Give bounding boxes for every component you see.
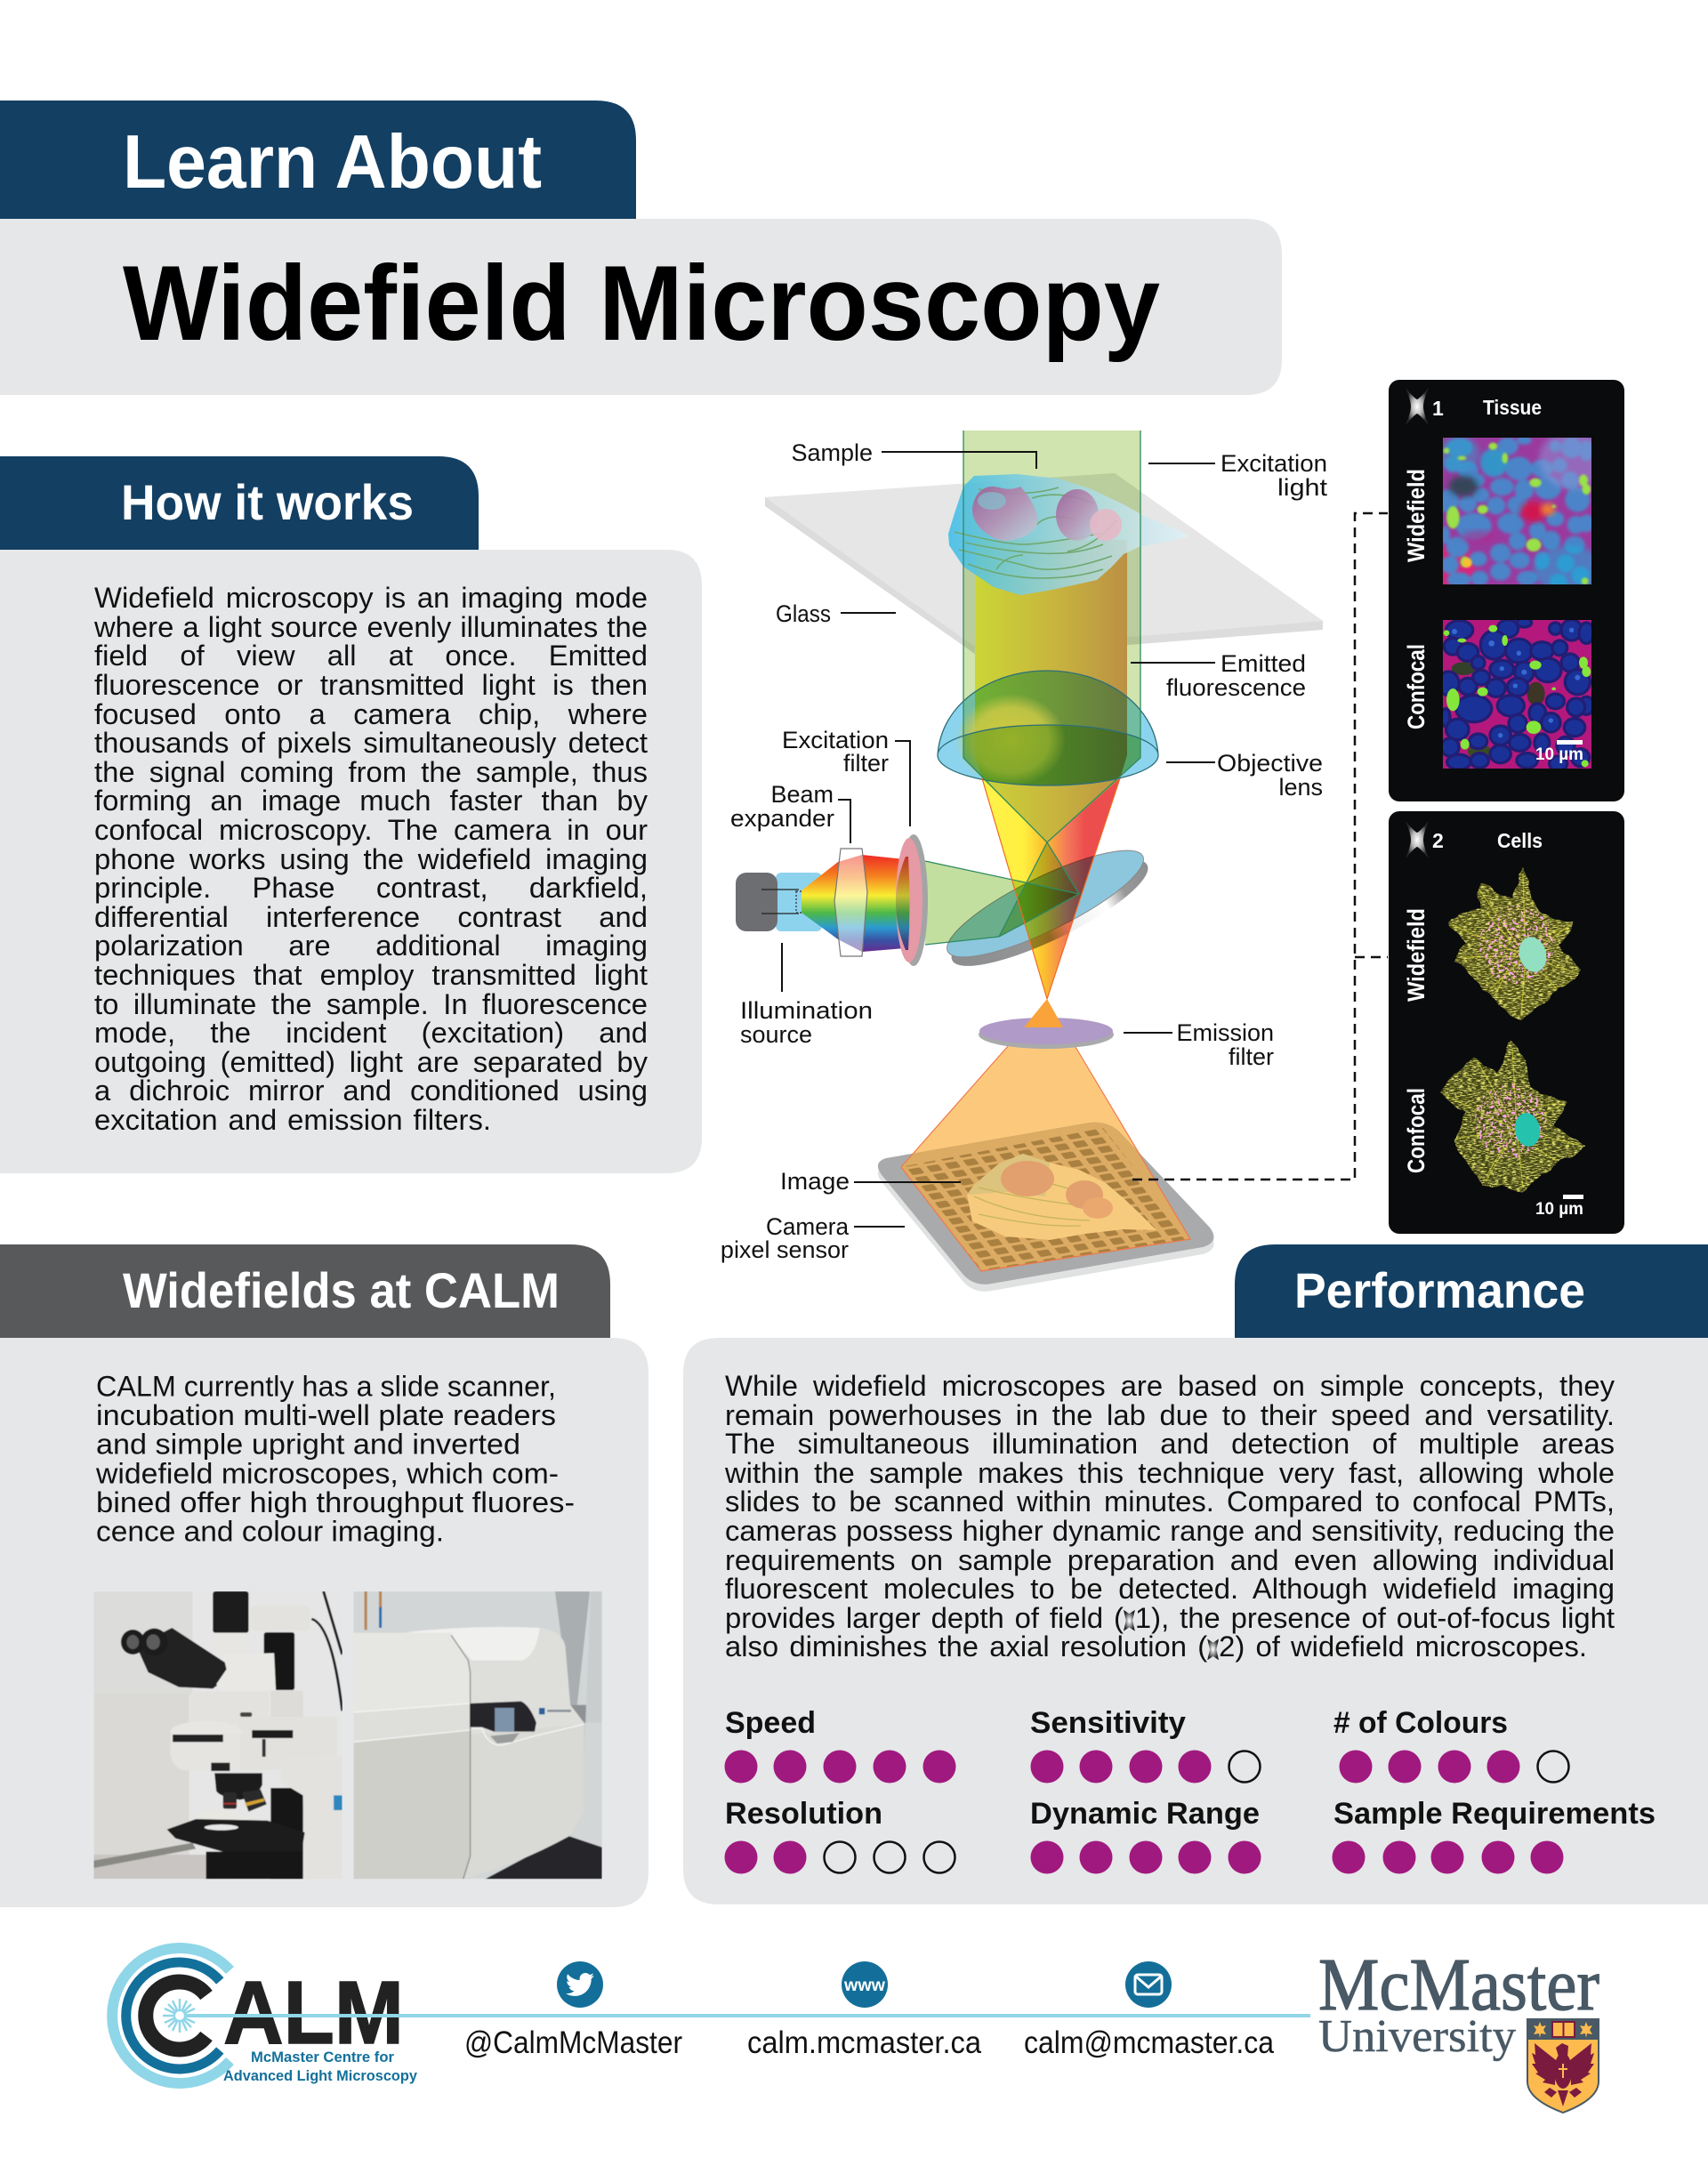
photo: slide scanner (353, 1591, 602, 1879)
label: Emitted fluorescence: Emitted (1221, 650, 1306, 677)
label: Excitation filter: Excitation (782, 727, 889, 753)
text: how it works description: to illuminate the sample. In fluorescence (94, 987, 648, 1020)
label: Emitted fluorescence: fluorescence (1166, 674, 1306, 701)
text: CALM instruments description: cence and colour imaging. (96, 1516, 444, 1548)
cone edge lines (901, 1045, 1190, 1271)
label: Glass (776, 600, 896, 627)
logo: CALM: McMaster Centre for (251, 2049, 394, 2065)
text: CALM instruments description: and simple upright and inverted (96, 1429, 520, 1461)
text: how it works description: polarization are additional imaging (94, 929, 648, 962)
text: how it works description: confocal microscopy. The camera in our (94, 813, 648, 846)
cone outline (982, 778, 1120, 999)
heading: Performance: Performance (1294, 1262, 1585, 1318)
rating: Resolution: Resolution (725, 1797, 882, 1831)
icon: crest (1527, 2019, 1599, 2113)
text: how it works description: techniques that employ transmitted light (94, 958, 648, 991)
label: Excitation light (1148, 450, 1328, 501)
contact: email (1024, 1961, 1274, 2060)
rating: Dynamic Range (1030, 1797, 1261, 1873)
text: how it works description: where a light source evenly illuminates the (94, 610, 648, 643)
connector: dashed line from image to example panels (1132, 513, 1388, 1180)
text: performance description: remain powerhouses in the lab due to their speed and versatility. (725, 1398, 1615, 1431)
illumination source (736, 873, 822, 931)
label: Emission filter: filter (1229, 1043, 1274, 1070)
camera pixel sensor (878, 1112, 1213, 1292)
text: performance description: While widefield microscopes are based on simple concepts, they (725, 1369, 1615, 1402)
text: how it works description: the signal coming from the sample, thus (94, 755, 648, 788)
photo: upright microscope (93, 1591, 342, 1879)
text: how it works description: mode, the incident (excitation) and (94, 1016, 648, 1049)
tab: Learn About: Learn About (123, 120, 542, 205)
objective lens base (964, 726, 1140, 785)
glass slide (765, 473, 1323, 656)
label: Emitted fluorescence (1131, 650, 1306, 701)
text: performance description: provides larger depth of field ( 1), the presence of out-of-focus light (725, 1601, 1615, 1634)
text: CALM instruments description (95, 1370, 575, 1548)
label: Illumination source: Illumination (740, 997, 873, 1024)
objective lens dome (938, 671, 1158, 785)
dichroic mirror (936, 833, 1159, 984)
text: how it works description: Widefield microscopy is an imaging mode (94, 581, 648, 614)
rotated label: Widefield: Widefield (1403, 469, 1430, 562)
beam outlines (925, 431, 1140, 945)
image: tissue widefield (1443, 438, 1591, 584)
label: Objective lens (1166, 750, 1323, 801)
logo: McMaster University: McMaster (1318, 1944, 1599, 2026)
heading: How it works: How it works (121, 474, 414, 530)
excitation light reaching mirror (925, 861, 1079, 945)
label: Excitation light: Excitation (1221, 450, 1327, 477)
projected orange image cone (901, 1045, 1190, 1271)
text: how it works description: thousands of pixels simultaneously detect (94, 726, 648, 759)
text: CALM instruments description: bined offer high throughput fluores- (96, 1486, 575, 1518)
rotated label: Confocal: Confocal (1403, 1088, 1430, 1173)
scale bar: 10 µm (1535, 745, 1583, 764)
text: performance description (725, 1369, 1615, 1663)
panel: cells example (1389, 811, 1624, 1234)
text: how it works description: phone works using the widefield imaging (94, 842, 648, 875)
rating: Resolution (724, 1797, 955, 1873)
objective lens glow (955, 694, 1066, 786)
text: how it works description: a dichroic mirror and conditioned using (94, 1074, 648, 1107)
text: how it works description: excitation and emission filters. (94, 1103, 491, 1136)
contact: email: calm@mcmaster.ca (1024, 2025, 1274, 2060)
beam expander lens (834, 849, 867, 956)
sample on glass (948, 474, 1188, 595)
heading: Cells (1432, 829, 1543, 852)
label: Beam expander: Beam (770, 781, 834, 808)
heading: Tissue: 1 (1432, 397, 1444, 420)
emission cone (982, 778, 1120, 999)
emission filter (979, 999, 1114, 1049)
beam crossing at mirror (999, 842, 1079, 937)
contact: website (747, 1961, 981, 2060)
diagram: widefield microscope light path (721, 431, 1328, 1292)
image: tissue confocal (1438, 618, 1594, 771)
heading: Tissue (1432, 396, 1542, 420)
text: performance description: requirements on sample preparation and even allowing individual (725, 1543, 1615, 1576)
text: how it works description: field of view all at once. Emitted (94, 639, 648, 672)
contact: twitter (464, 1961, 682, 2060)
label: Emission filter (1124, 1019, 1274, 1070)
label: Excitation filter: filter (843, 750, 889, 777)
panel: tissue example (1389, 380, 1624, 801)
icon: PSF marker 2 (1406, 821, 1429, 858)
text: CALM instruments description: incubation multi-well plate readers (96, 1399, 556, 1431)
text: performance description: slides to be scanned within minutes. Compared to confocal PMTs, (725, 1485, 1615, 1518)
heading: Widefields at CALM (0, 1244, 610, 1338)
label: Excitation light: light (1277, 474, 1328, 501)
label: Objective lens: lens (1278, 774, 1323, 801)
label: Excitation filter (782, 727, 910, 826)
logo: CALM: ALM (223, 1963, 404, 2063)
text: performance description: The simultaneous illumination and detection of multiple areas (725, 1427, 1615, 1460)
contact: website: calm.mcmaster.ca (747, 2025, 981, 2060)
footer line (180, 2014, 1310, 2017)
label: Image: Image (780, 1168, 850, 1195)
text: how it works description: forming an image much faster than by (94, 784, 648, 817)
text: how it works description: outgoing (emitted) light are separated by (94, 1045, 648, 1078)
label: Camera pixel sensor: pixel sensor (721, 1236, 849, 1263)
contact: website: www (843, 1977, 885, 1995)
panel: performance background (683, 1338, 1708, 1904)
emitted fluorescence column (975, 540, 1127, 842)
rating: number of colours (1333, 1706, 1569, 1783)
icon: PSF marker 1 (1406, 388, 1429, 425)
rotated label: Widefield: Widefield (1403, 908, 1430, 1002)
scale bar: 10 µm (1535, 1200, 1583, 1219)
heading: How it works (0, 456, 479, 550)
heading: Performance (1235, 1244, 1708, 1338)
heading: Cells: Cells (1497, 829, 1543, 852)
label: Illumination source: source (740, 1021, 812, 1048)
rating: number of colours: # of Colours (1333, 1706, 1508, 1740)
rotated label: Confocal: Confocal (1403, 644, 1430, 729)
heading: Widefields at CALM: Widefields at CALM (123, 1262, 560, 1318)
text: how it works description (94, 581, 648, 1136)
logo: CALM (112, 1948, 418, 2084)
logo: McMaster University: University (1318, 2011, 1516, 2062)
label: Emission filter: Emission (1176, 1019, 1274, 1046)
label: Objective lens: Objective (1217, 750, 1323, 777)
text: performance description: fluorescent molecules to be detected. Although widefield imaging (725, 1572, 1615, 1605)
rating: Dynamic Range: Dynamic Range (1030, 1797, 1260, 1831)
rating: Sample Requirements: Sample Requirements (1333, 1797, 1656, 1831)
title panel: Widefield Microscopy: Widefield Microscopy (123, 244, 1160, 363)
logo: McMaster University (1318, 1944, 1599, 2113)
contact: twitter: @CalmMcMaster (464, 2025, 682, 2060)
rating: Sensitivity: Sensitivity (1030, 1706, 1186, 1740)
image: cell widefield (1447, 867, 1583, 1020)
rating: Speed: Speed (725, 1706, 816, 1740)
rating: Speed (724, 1706, 955, 1783)
tab: Learn About (0, 101, 636, 219)
text: performance description: cameras possess higher dynamic range and sensitivity, reducing the (725, 1514, 1615, 1547)
rainbow beam (802, 855, 905, 952)
excitation filter (896, 834, 928, 966)
logo: CALM: Advanced Light Microscopy (223, 2067, 418, 2084)
heading: Tissue: Tissue (1483, 396, 1542, 419)
text: CALM instruments description: CALM currently has a slide scanner, (96, 1370, 556, 1402)
label: Sample (791, 439, 1036, 469)
rating: Sensitivity (1030, 1706, 1260, 1783)
label: Sample: Sample (791, 439, 873, 466)
label: Camera pixel sensor (721, 1213, 905, 1263)
projected sample image (967, 1154, 1156, 1240)
text: performance description: within the sample makes this technique very fast, allowing whole (725, 1456, 1615, 1489)
text: how it works description: focused onto a camera chip, where (94, 697, 648, 730)
text: how it works description: fluorescence or transmitted light is then (94, 668, 648, 701)
title panel: Widefield Microscopy (0, 219, 1282, 395)
rating: Sample Requirements (1333, 1797, 1656, 1873)
label: Beam expander: expander (730, 805, 834, 832)
objective lens outline (938, 671, 1158, 785)
heading: Cells: 2 (1432, 829, 1444, 852)
label: Glass: Glass (776, 600, 831, 627)
label: Illumination source (740, 943, 873, 1048)
text: CALM instruments description: widefield microscopes, which com- (95, 1457, 559, 1489)
label: Beam expander (730, 781, 850, 843)
image: cell confocal (1438, 1041, 1585, 1191)
text: performance description: also diminishes the axial resolution ( 2) of widefield microscopes. (725, 1630, 1587, 1663)
text: how it works description: principle. Phase contrast, darkfield, (94, 871, 648, 904)
panel: widefields at CALM background (0, 1338, 649, 1907)
excitation light beam (963, 431, 1140, 842)
text: how it works description: differential interference contrast and (94, 900, 648, 933)
panel: how it works background (0, 550, 702, 1173)
label: Camera pixel sensor: Camera (766, 1213, 850, 1240)
